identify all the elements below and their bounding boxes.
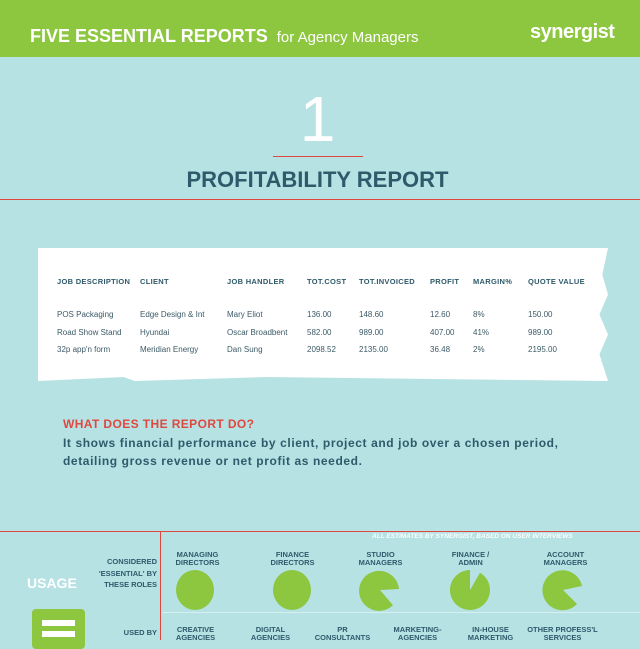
- table panel: [38, 248, 608, 381]
- text: AGENCIES: [251, 633, 290, 642]
- header bar: [0, 0, 640, 57]
- table panel: Oscar Broadbent: [227, 328, 287, 336]
- table panel: TOT.INVOICED: [359, 277, 415, 286]
- table panel: CLIENT: [140, 277, 169, 286]
- description: detailing gross revenue or net profit as needed.: [63, 454, 363, 468]
- text: SERVICES: [544, 633, 581, 642]
- text: USED BY: [124, 628, 157, 637]
- table panel: 12.60: [430, 310, 450, 319]
- table panel: 32p app'n form: [57, 345, 110, 354]
- table panel: Mary Eliot: [227, 310, 263, 319]
- text: MANAGERS: [359, 558, 402, 567]
- table panel: TOT.COST: [307, 277, 346, 286]
- text: DIGITAL: [256, 625, 285, 634]
- table panel: POS Packaging: [57, 310, 113, 319]
- table panel: 989.00: [528, 328, 552, 336]
- table panel: JOB HANDLER: [227, 277, 284, 286]
- description: It shows financial performance by client, project and job over a chosen period,: [63, 436, 559, 450]
- icon: usage: [32, 609, 85, 649]
- text: AGENCIES: [398, 633, 437, 642]
- row label: CONSIDERED: [107, 557, 157, 566]
- table panel: PROFIT: [430, 277, 459, 286]
- row label: THESE ROLES: [104, 580, 157, 589]
- table panel: Meridian Energy: [140, 345, 198, 354]
- text: OTHER PROFESS'L: [527, 625, 598, 634]
- text: MARKETING: [468, 633, 513, 642]
- table panel: 2098.52: [307, 345, 336, 354]
- table panel: 2135.00: [359, 345, 388, 354]
- text: PR: [337, 625, 348, 634]
- table panel: Road Show Stand: [57, 328, 122, 336]
- title: FIVE ESSENTIAL REPORTS for Agency Managers: [30, 26, 418, 46]
- roles: MANAGING: [177, 550, 218, 559]
- used by: AGENCIES: [176, 633, 215, 642]
- table panel: 2%: [473, 345, 485, 354]
- table panel: QUOTE VALUE: [528, 277, 585, 286]
- table panel: Hyundai: [140, 328, 169, 336]
- table panel: 36.48: [430, 345, 450, 354]
- roles: DIRECTORS: [175, 558, 220, 567]
- table panel: JOB DESCRIPTION: [57, 277, 130, 286]
- usage label: USAGE: [27, 575, 77, 591]
- number: 1: [300, 83, 335, 155]
- text: IN-HOUSE: [472, 625, 509, 634]
- table panel: 41%: [473, 328, 489, 336]
- text: STUDIO: [366, 550, 395, 559]
- table panel: MARGIN%: [473, 277, 512, 286]
- table panel: 2195.00: [528, 345, 557, 354]
- table panel: Edge Design & Int: [140, 310, 204, 319]
- logo: synergist: [530, 21, 614, 43]
- table panel: 582.00: [307, 328, 331, 336]
- row label: [99, 557, 157, 589]
- table panel: Dan Sung: [227, 345, 263, 354]
- text: CONSULTANTS: [315, 633, 370, 642]
- text: FINANCE /: [452, 550, 489, 559]
- text: MARKETING-: [394, 625, 441, 634]
- report heading: PROFITABILITY REPORT: [186, 167, 448, 192]
- table panel: 989.00: [359, 328, 383, 336]
- note: ALL ESTIMATES BY SYNERGIST, BASED ON USER INTERVIEWS: [372, 533, 573, 540]
- row label: 'ESSENTIAL' BY: [99, 568, 157, 578]
- table panel: 150.00: [528, 310, 552, 319]
- table panel: 407.00: [430, 328, 454, 336]
- table panel: 136.00: [307, 310, 331, 319]
- text: FINANCE: [276, 550, 309, 559]
- table panel: 8%: [473, 310, 485, 319]
- table panel: 148.60: [359, 310, 383, 319]
- used by: CREATIVE: [177, 625, 214, 634]
- text: MANAGERS: [544, 558, 587, 567]
- text: ACCOUNT: [547, 550, 584, 559]
- roles: [175, 550, 220, 567]
- used by: [176, 625, 215, 642]
- description: WHAT DOES THE REPORT DO?: [63, 417, 254, 431]
- text: DIRECTORS: [270, 558, 315, 567]
- text: ADMIN: [458, 558, 483, 567]
- description: [63, 417, 559, 468]
